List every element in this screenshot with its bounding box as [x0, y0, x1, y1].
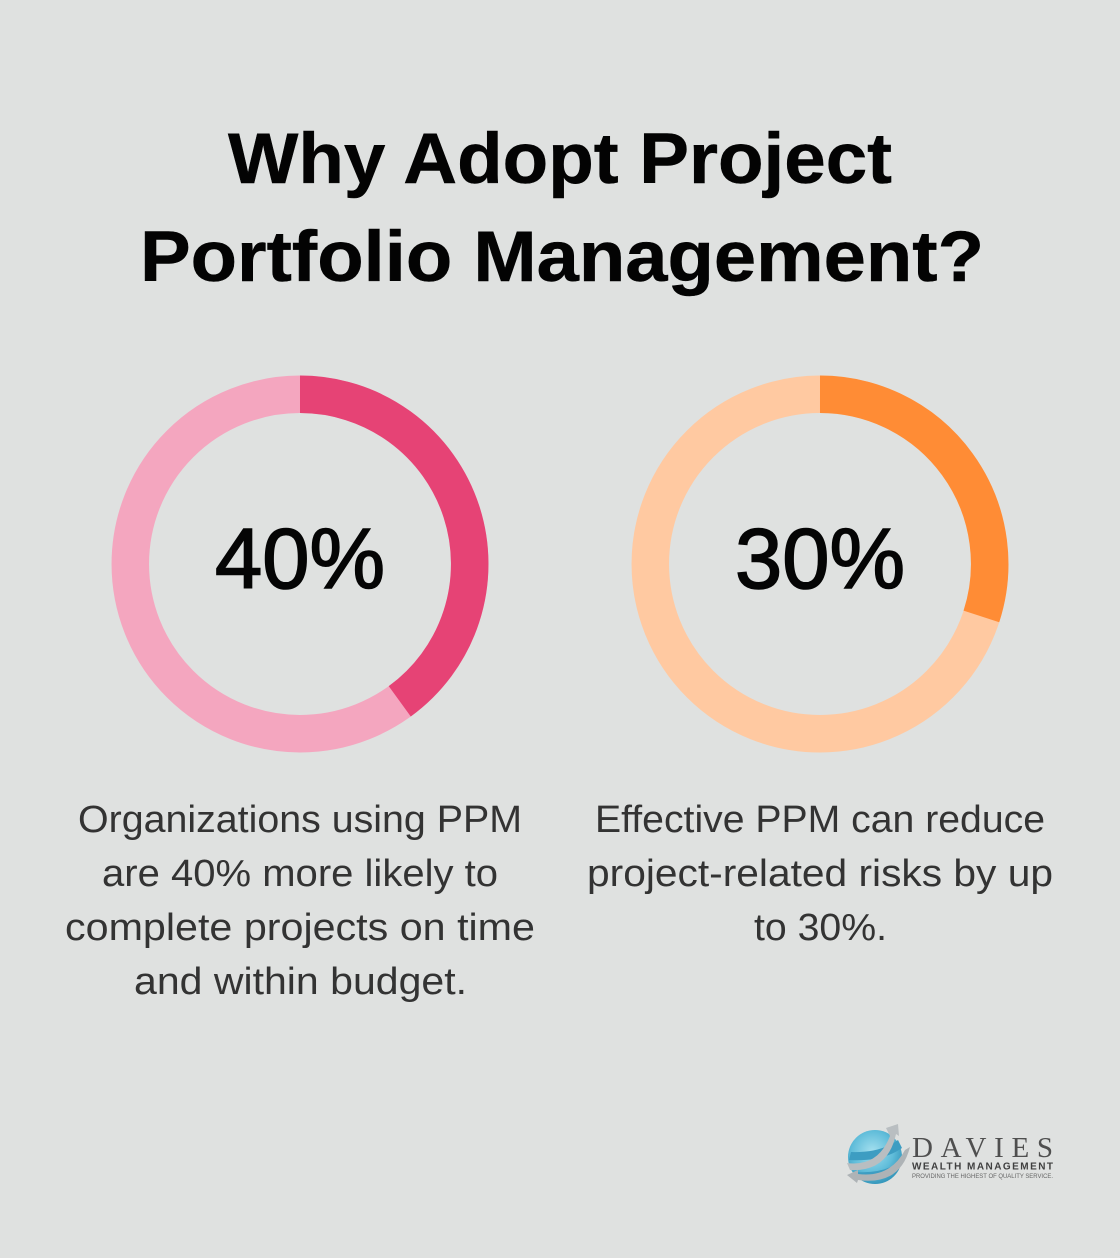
- stat value: 30%: 30%: [735, 512, 905, 607]
- wordmark subtitle: WEALTH MANAGEMENT: [912, 1162, 1053, 1172]
- icon: globe with arrows: [847, 1124, 910, 1184]
- donut chart: 30%: [650, 394, 990, 734]
- tagline: PROVIDING THE HIGHEST OF QUALITY SERVICE.: [912, 1173, 1053, 1180]
- description: 30% statistic: Effective PPM can reduce: [595, 799, 1045, 841]
- description: 30% statistic: to 30%.: [754, 907, 887, 949]
- description: 30% statistic: project-related risks by up: [587, 853, 1053, 895]
- description: 40% statistic: are 40% more likely to: [102, 853, 498, 895]
- panel: 30% statistic: [587, 394, 1053, 949]
- title: Portfolio Management?: [140, 218, 984, 297]
- stat value: 40%: 40%: [215, 512, 385, 607]
- title: Why Adopt Project: [228, 120, 892, 199]
- description: 40% statistic: and within budget.: [134, 961, 467, 1003]
- description: 40% statistic: complete projects on time: [65, 907, 535, 949]
- panel: 40% statistic: [65, 394, 535, 1003]
- description: 40% statistic: Organizations using PPM: [78, 799, 522, 841]
- donut chart: 40%: [130, 394, 470, 734]
- description: 40% statistic: [65, 799, 535, 1003]
- description: 30% statistic: [587, 799, 1053, 949]
- title: [140, 120, 984, 297]
- logo: Davies Wealth Management: [847, 1124, 1053, 1184]
- wordmark: DAVIES: [912, 1132, 1053, 1164]
